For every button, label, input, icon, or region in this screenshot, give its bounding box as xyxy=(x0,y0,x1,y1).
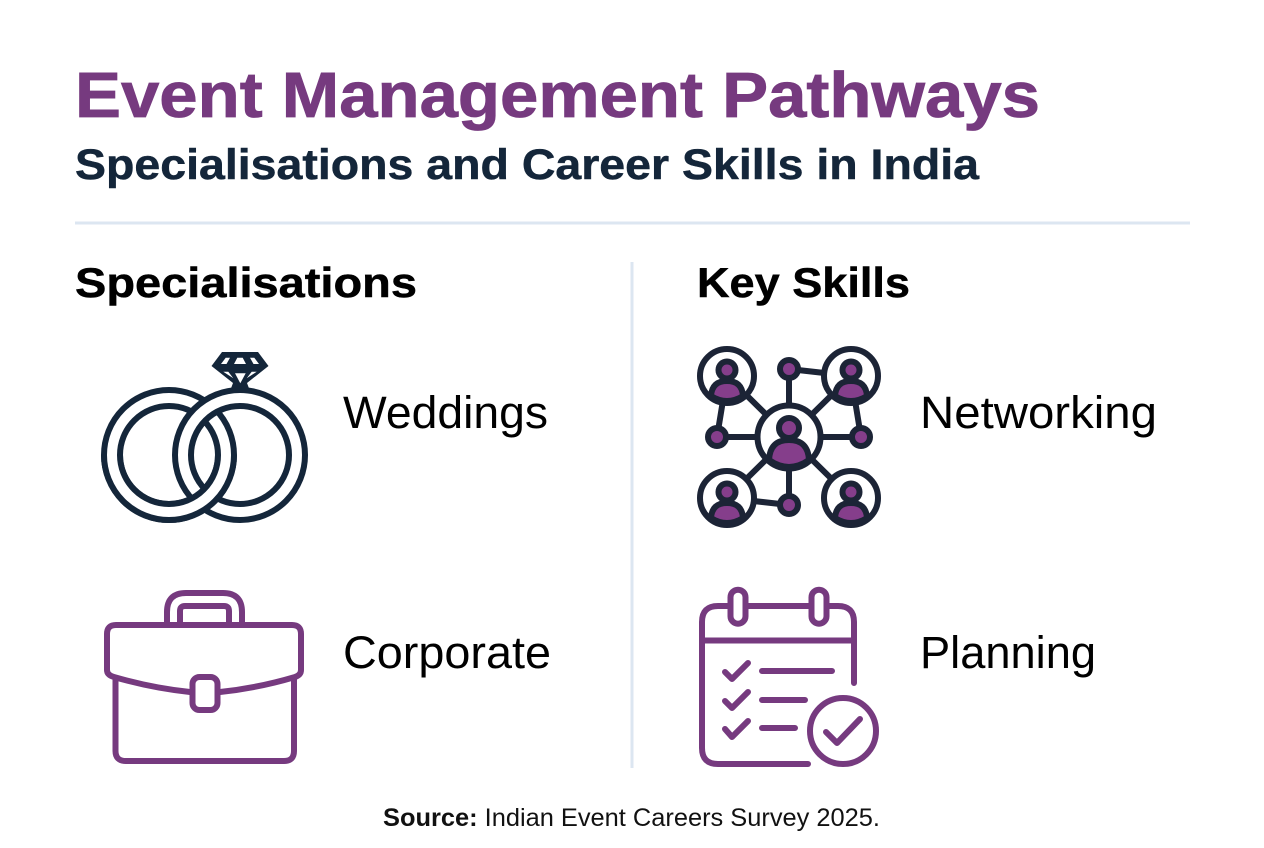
binder rings xyxy=(730,590,826,624)
case top xyxy=(107,625,301,692)
label: corporate: Corporate xyxy=(343,627,551,678)
connecting lines xyxy=(717,369,861,505)
icon: wedding rings xyxy=(104,352,305,520)
centre person xyxy=(758,406,820,468)
left ring overlap xyxy=(101,456,237,523)
case body xyxy=(116,679,294,761)
label: weddings: Weddings xyxy=(343,387,548,438)
subtitle: Specialisations and Career Skills in India xyxy=(75,141,980,189)
approval badge xyxy=(810,698,876,764)
small nodes xyxy=(708,360,870,514)
person top right xyxy=(824,349,878,403)
person top left xyxy=(700,349,754,403)
icon: network xyxy=(700,349,878,525)
person bottom right xyxy=(824,471,878,525)
icon: briefcase xyxy=(107,593,301,761)
person bottom left xyxy=(700,471,754,525)
heading: key skills: Key Skills xyxy=(697,259,910,306)
source note: Source: Indian Event Careers Survey 2025. xyxy=(383,804,880,832)
left ring xyxy=(104,390,234,520)
label: networking: Networking xyxy=(920,387,1157,438)
handle xyxy=(167,593,242,624)
right ring xyxy=(175,390,305,520)
infographic canvas xyxy=(75,70,1190,831)
icon: calendar checklist xyxy=(702,590,876,764)
clasp xyxy=(192,677,218,710)
calendar frame xyxy=(702,606,854,764)
label: planning: Planning xyxy=(920,627,1096,678)
checklist xyxy=(725,663,832,737)
title: Event Management Pathways xyxy=(75,59,1040,131)
heading: specialisations: Specialisations xyxy=(75,259,417,306)
diamond xyxy=(212,352,268,391)
